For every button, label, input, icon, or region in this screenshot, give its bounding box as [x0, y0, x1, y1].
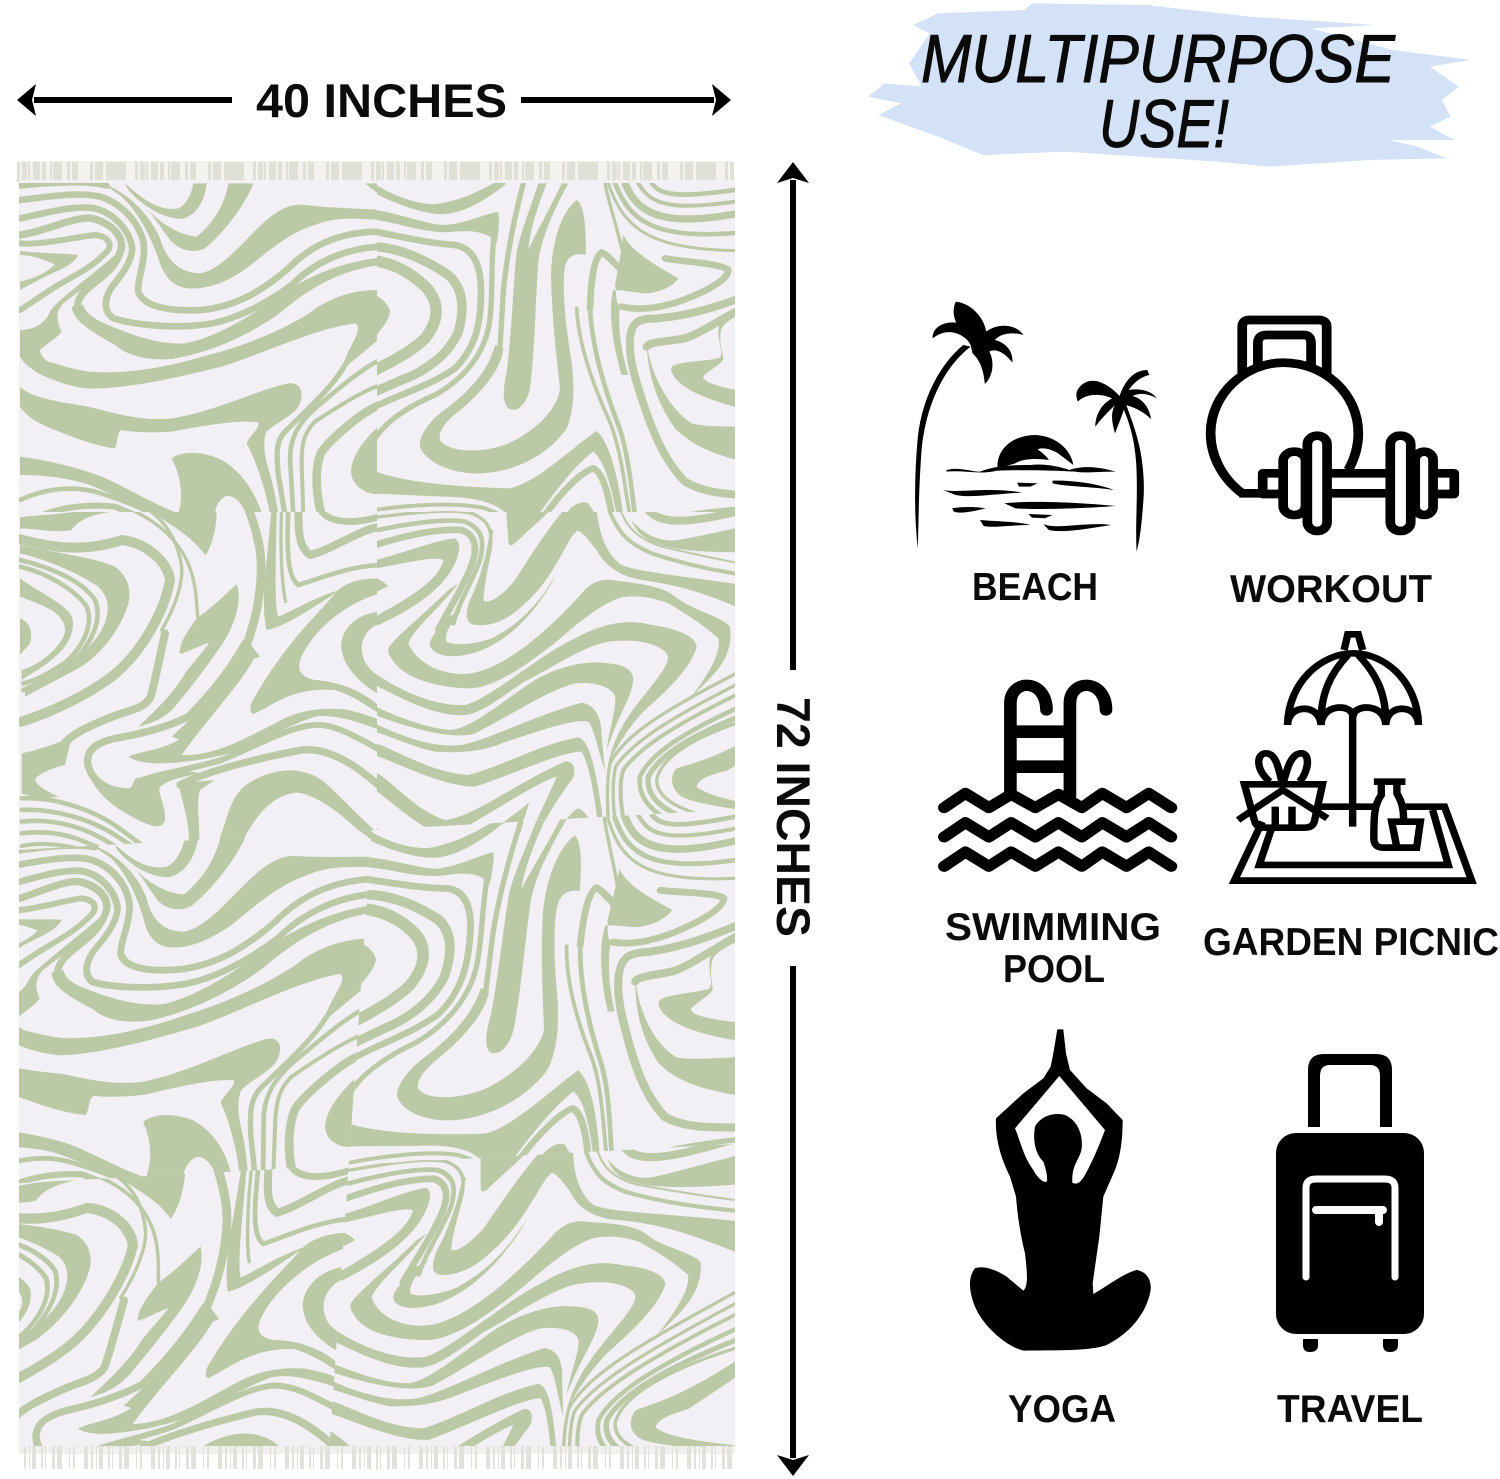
icon: swimming pool	[944, 685, 1171, 866]
icon: workout	[1211, 320, 1454, 531]
height dimension arrow	[777, 162, 809, 1476]
icon: garden picnic	[1234, 634, 1472, 881]
label: swimming pool: SWIMMING	[945, 906, 1161, 949]
title	[921, 21, 1396, 162]
height label: 72 INCHES	[767, 697, 820, 937]
width dimension arrow	[17, 84, 731, 116]
label: yoga: YOGA	[1008, 1388, 1116, 1431]
towel fabric	[19, 180, 735, 1446]
label: beach: BEACH	[972, 566, 1098, 609]
label: swimming pool: POOL	[1003, 948, 1105, 991]
title: MULTIPURPOSE	[921, 21, 1396, 97]
towel	[0, 161, 778, 1479]
icon: yoga	[970, 1029, 1151, 1351]
suitcase handle	[1308, 1054, 1392, 1127]
width label: 40 INCHES	[256, 74, 507, 127]
suitcase body	[1276, 1133, 1424, 1334]
label: swimming pool	[945, 906, 1161, 991]
swirl pattern	[19, 183, 735, 1446]
icon: beach	[915, 302, 1157, 552]
label: travel: TRAVEL	[1277, 1388, 1423, 1431]
bottom fringe	[19, 1440, 735, 1454]
suitcase wheels	[1303, 1339, 1398, 1352]
top fringe	[17, 161, 734, 182]
title: USE!	[1099, 86, 1229, 162]
suitcase details	[1306, 1179, 1395, 1277]
icon: travel suitcase	[1276, 1054, 1424, 1352]
label: workout: WORKOUT	[1230, 568, 1432, 611]
brush stroke behind title	[868, 3, 1471, 167]
